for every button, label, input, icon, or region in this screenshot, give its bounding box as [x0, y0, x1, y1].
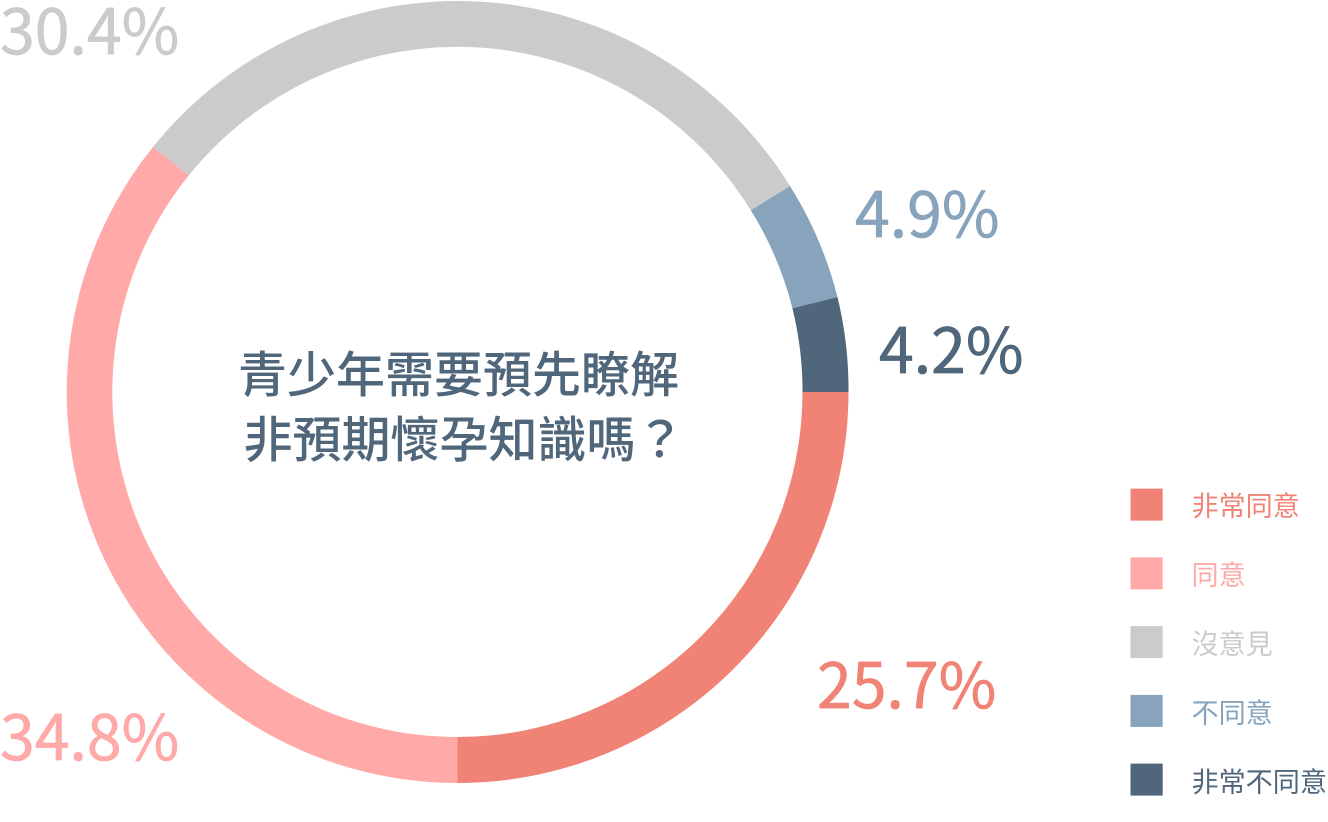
legend item: agree	[1130, 554, 1246, 592]
segment: strongly agree 25.7%	[458, 392, 848, 783]
segment: disagree 4.9%	[751, 186, 838, 308]
legend item: strongly agree: 非常同意	[1192, 484, 1300, 524]
legend item: strongly disagree: 非常不同意	[1192, 760, 1327, 800]
segment: strongly disagree 4.2%	[792, 297, 849, 392]
center title: 非預期懷孕知識嗎？	[244, 401, 685, 472]
segment: no opinion 30.4%	[153, 1, 790, 210]
value: disagree: 4.9%	[855, 165, 1000, 256]
legend item: no opinion: 沒意見	[1192, 622, 1273, 662]
legend item: no opinion	[1130, 622, 1273, 662]
legend item: disagree	[1130, 692, 1273, 730]
center title	[238, 336, 685, 472]
legend item: strongly agree	[1130, 484, 1300, 524]
legend item: disagree: 不同意	[1192, 692, 1273, 730]
legend	[1130, 484, 1327, 800]
donut chart	[67, 1, 849, 783]
center title: 青少年需要預先瞭解	[238, 336, 679, 407]
value: agree: 34.8%	[0, 688, 179, 779]
value: strongly agree: 25.7%	[817, 636, 996, 727]
legend item: agree: 同意	[1192, 554, 1246, 592]
value: strongly disagree: 4.2%	[879, 301, 1024, 392]
segment: agree 34.8%	[67, 147, 458, 783]
legend item: strongly disagree	[1130, 760, 1327, 800]
